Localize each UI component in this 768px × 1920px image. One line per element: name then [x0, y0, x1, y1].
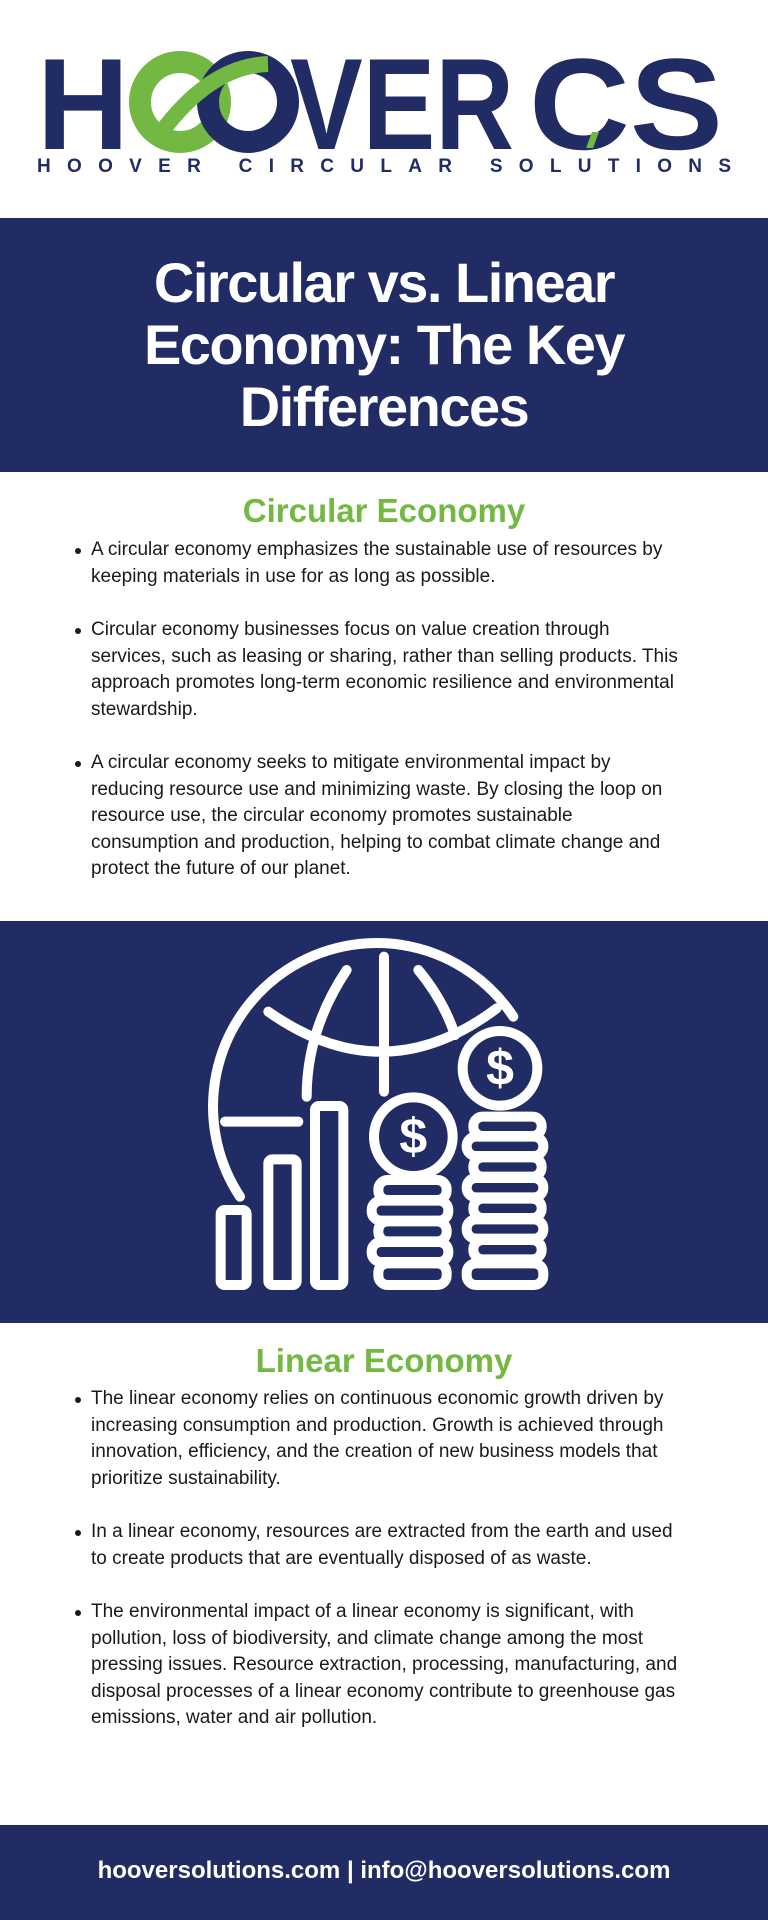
icon: globe with bars and coins: [208, 938, 548, 1290]
title band: [0, 218, 768, 472]
linear bullets: The environmental impact of a linear economy is significant, with pollution, loss of biodiversity, and climate change among the most pressing issues. Resource extraction, processing, manufacturing, and disposal processes of a linear economy contribute to greenhouse gas emissions, water and air pollution.: [91, 1601, 677, 1728]
heading: linear economy: Linear Economy: [256, 1342, 512, 1379]
icon: globe with bars and coins: $: [399, 1108, 427, 1164]
title: Circular vs. Linear: [154, 251, 614, 314]
footer: [0, 1825, 768, 1920]
icon band: [0, 921, 768, 1323]
circular bullets: [75, 539, 678, 879]
circular bullets: Circular economy businesses focus on value creation through services, such as leasing or sharing, rather than selling products. This approach promotes long-term economic resilience and environmental stewardship.: [91, 619, 678, 720]
logo wordmark: [37, 31, 723, 177]
title: [144, 251, 626, 438]
heading: circular economy: Circular Economy: [243, 492, 525, 529]
logo wordmark: VER: [290, 31, 514, 177]
title: Economy: The Key: [144, 313, 624, 376]
circular bullets: A circular economy emphasizes the sustainable use of resources by keeping materials in use for as long as possible.: [91, 539, 662, 586]
circular bullets: A circular economy seeks to mitigate environmental impact by reducing resource use and minimizing waste. By closing the loop on resource use, the circular economy promotes sustainable consumption and production, helping to combat climate change and protect the future of our planet.: [91, 752, 662, 879]
logo subtitle: HOOVER CIRCULAR SOLUTIONS: [37, 156, 731, 177]
logo wordmark: CS: [529, 31, 723, 177]
title: Differences: [240, 375, 528, 438]
logo wordmark: H: [37, 31, 129, 177]
linear bullets: In a linear economy, resources are extracted from the earth and used to create products that are eventually disposed of as waste.: [91, 1521, 673, 1568]
footer contact text: hooversolutions.com | info@hooversolutions.com: [98, 1857, 670, 1884]
linear bullets: The linear economy relies on continuous economic growth driven by increasing consumption and production. Growth is achieved through innovation, efficiency, and the creation of new business models that prioritize sustainability.: [91, 1388, 663, 1488]
linear bullets: [75, 1388, 677, 1728]
icon: globe with bars and coins: $: [486, 1040, 514, 1096]
logo: [37, 31, 731, 177]
